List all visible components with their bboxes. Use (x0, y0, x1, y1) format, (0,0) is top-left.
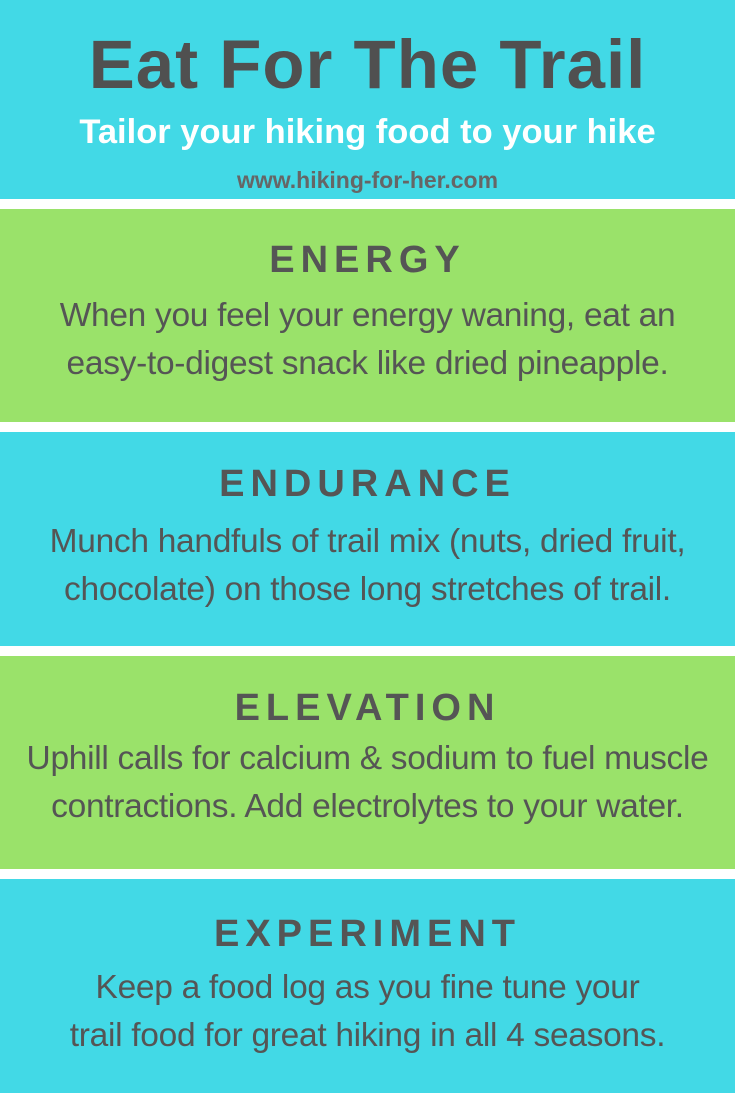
heading: energy: ENERGY (269, 239, 466, 281)
text: experiment (70, 969, 665, 1054)
text: energy: When you feel your energy waning, eat an (60, 297, 675, 334)
text: elevation: Uphill calls for calcium & sodium to fuel muscle (27, 740, 708, 777)
text: energy (60, 297, 675, 382)
heading: experiment: EXPERIMENT (214, 913, 521, 955)
header panel (0, 0, 735, 199)
text: experiment: Keep a food log as you fine tune your (96, 969, 639, 1006)
subtitle: Tailor your hiking food to your hike (79, 113, 656, 151)
text: elevation (27, 740, 708, 825)
panel: elevation (0, 656, 735, 869)
text: elevation: contractions. Add electrolytes to your water. (51, 788, 684, 825)
heading: endurance: ENDURANCE (219, 463, 516, 505)
website: www.hiking-for-her.com (237, 167, 498, 193)
panel: endurance (0, 432, 735, 646)
text: energy: easy-to-digest snack like dried pineapple. (67, 345, 668, 382)
text: endurance: chocolate) on those long stretches of trail. (64, 571, 671, 608)
text: experiment: trail food for great hiking in all 4 seasons. (70, 1017, 665, 1054)
text: endurance (50, 523, 685, 608)
text: endurance: Munch handfuls of trail mix (nuts, dried fruit, (50, 523, 685, 560)
title: Eat For The Trail (89, 26, 646, 103)
panel: energy (0, 209, 735, 422)
panel: experiment (0, 879, 735, 1093)
heading: elevation: ELEVATION (235, 687, 500, 729)
